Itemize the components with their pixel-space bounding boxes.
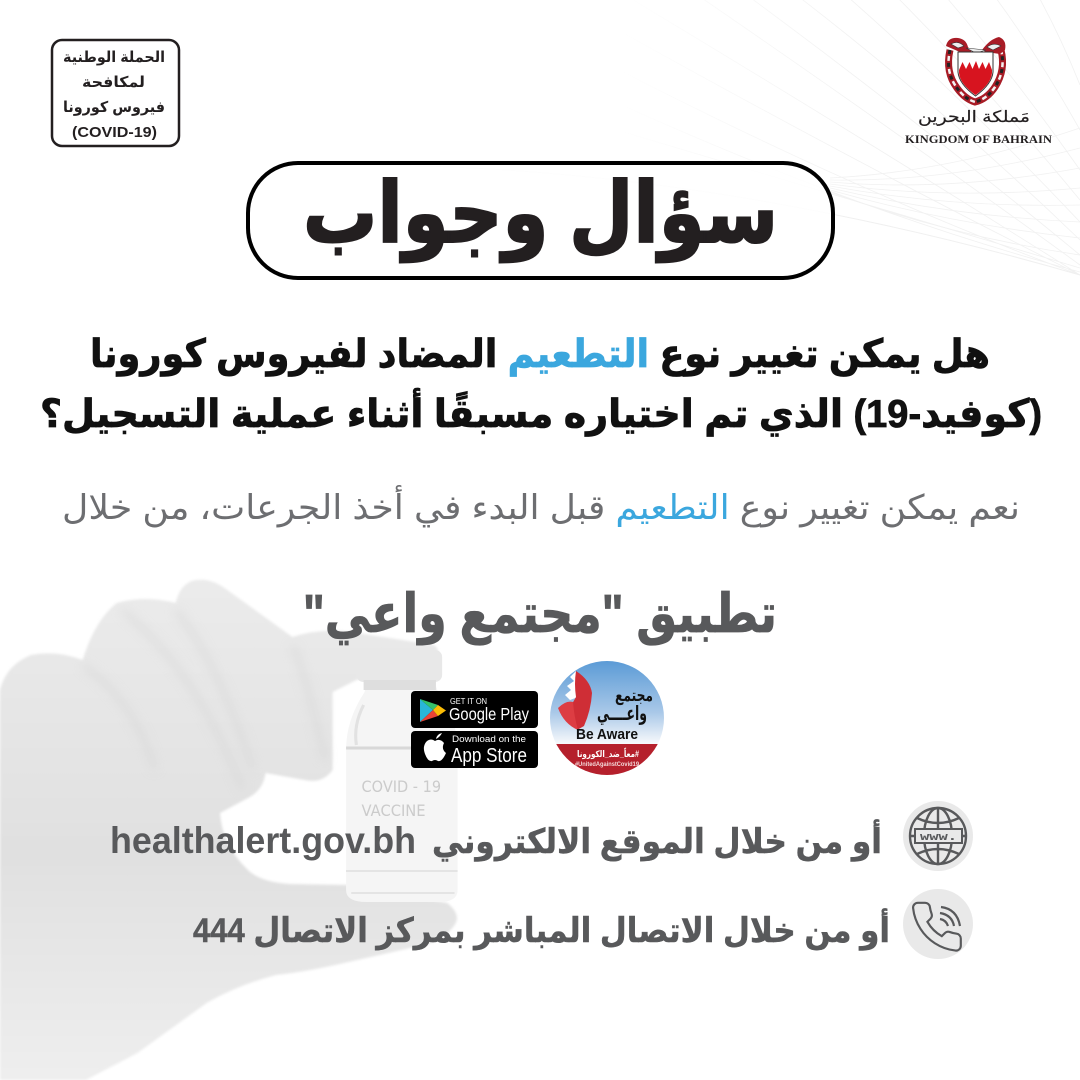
campaign badge: لمكافحة (82, 74, 145, 91)
badge: Be Aware app: واعــــي (597, 703, 647, 726)
ribbon flag (558, 671, 592, 730)
icon: phone (903, 889, 973, 959)
website line: أو من خلال الموقع الالكتروني (432, 819, 882, 862)
vaccine vial: VACCINE (362, 801, 426, 820)
logo: Kingdom of Bahrain (905, 37, 1052, 146)
question text: (كوفيد-19) الذي تم اختياره مسبقًا أثناء عملية التسجيل؟ (40, 388, 1042, 437)
badge: Be Aware app: #معاً_ضد_الكورونا (577, 747, 639, 760)
Arabic wordmark: مَملكة البحرين (918, 109, 1030, 127)
answer text: نعم يمكن تغيير نوع التطعيم قبل البدء في أخذ الجرعات، من خلال (62, 485, 1020, 528)
question text (40, 333, 1042, 437)
vaccine vial (346, 650, 458, 902)
badge: Be Aware app: مجتمع (615, 686, 653, 706)
badge: App Store: App Store (451, 745, 527, 767)
badge: App Store: Download on the (452, 734, 526, 744)
icon: apple (424, 733, 446, 761)
badge: Be Aware app (550, 661, 664, 776)
vial label: COVID - 19 (362, 777, 441, 796)
badge: Google Play: Google Play (449, 704, 529, 724)
icon: play triangle (420, 699, 446, 722)
campaign badge: فيروس كورونا (63, 99, 165, 116)
badge: Google Play (411, 691, 538, 728)
campaign badge: (COVID-19) (72, 124, 157, 141)
emblem (946, 37, 1005, 102)
campaign badge: الحملة الوطنية (63, 49, 165, 66)
badge: Google Play: GET IT ON (450, 696, 487, 706)
website line (110, 819, 882, 862)
icon: globe www: www. (920, 830, 957, 843)
icon: globe www (903, 801, 973, 871)
campaign badge (52, 40, 179, 146)
photo: gloved hand holding vaccine vial (0, 580, 458, 1080)
app name heading: تطبيق "مجتمع واعي" (303, 584, 777, 645)
heading: question and answer: سؤال وجواب (303, 166, 778, 263)
English wordmark: KINGDOM OF BAHRAIN (905, 132, 1052, 146)
question text: هل يمكن تغيير نوع التطعيم المضاد لفيروس كورونا (90, 333, 990, 377)
badge: Be Aware app: Be Aware (576, 726, 638, 743)
badge: Be Aware app: #UnitedAgainstCovid19 (575, 761, 639, 768)
badge: App Store (411, 731, 538, 768)
website line: healthalert.gov.bh (110, 820, 416, 861)
gloved hand (0, 580, 457, 1080)
call centre line: أو من خلال الاتصال المباشر بمركز الاتصال 444 (193, 908, 890, 951)
